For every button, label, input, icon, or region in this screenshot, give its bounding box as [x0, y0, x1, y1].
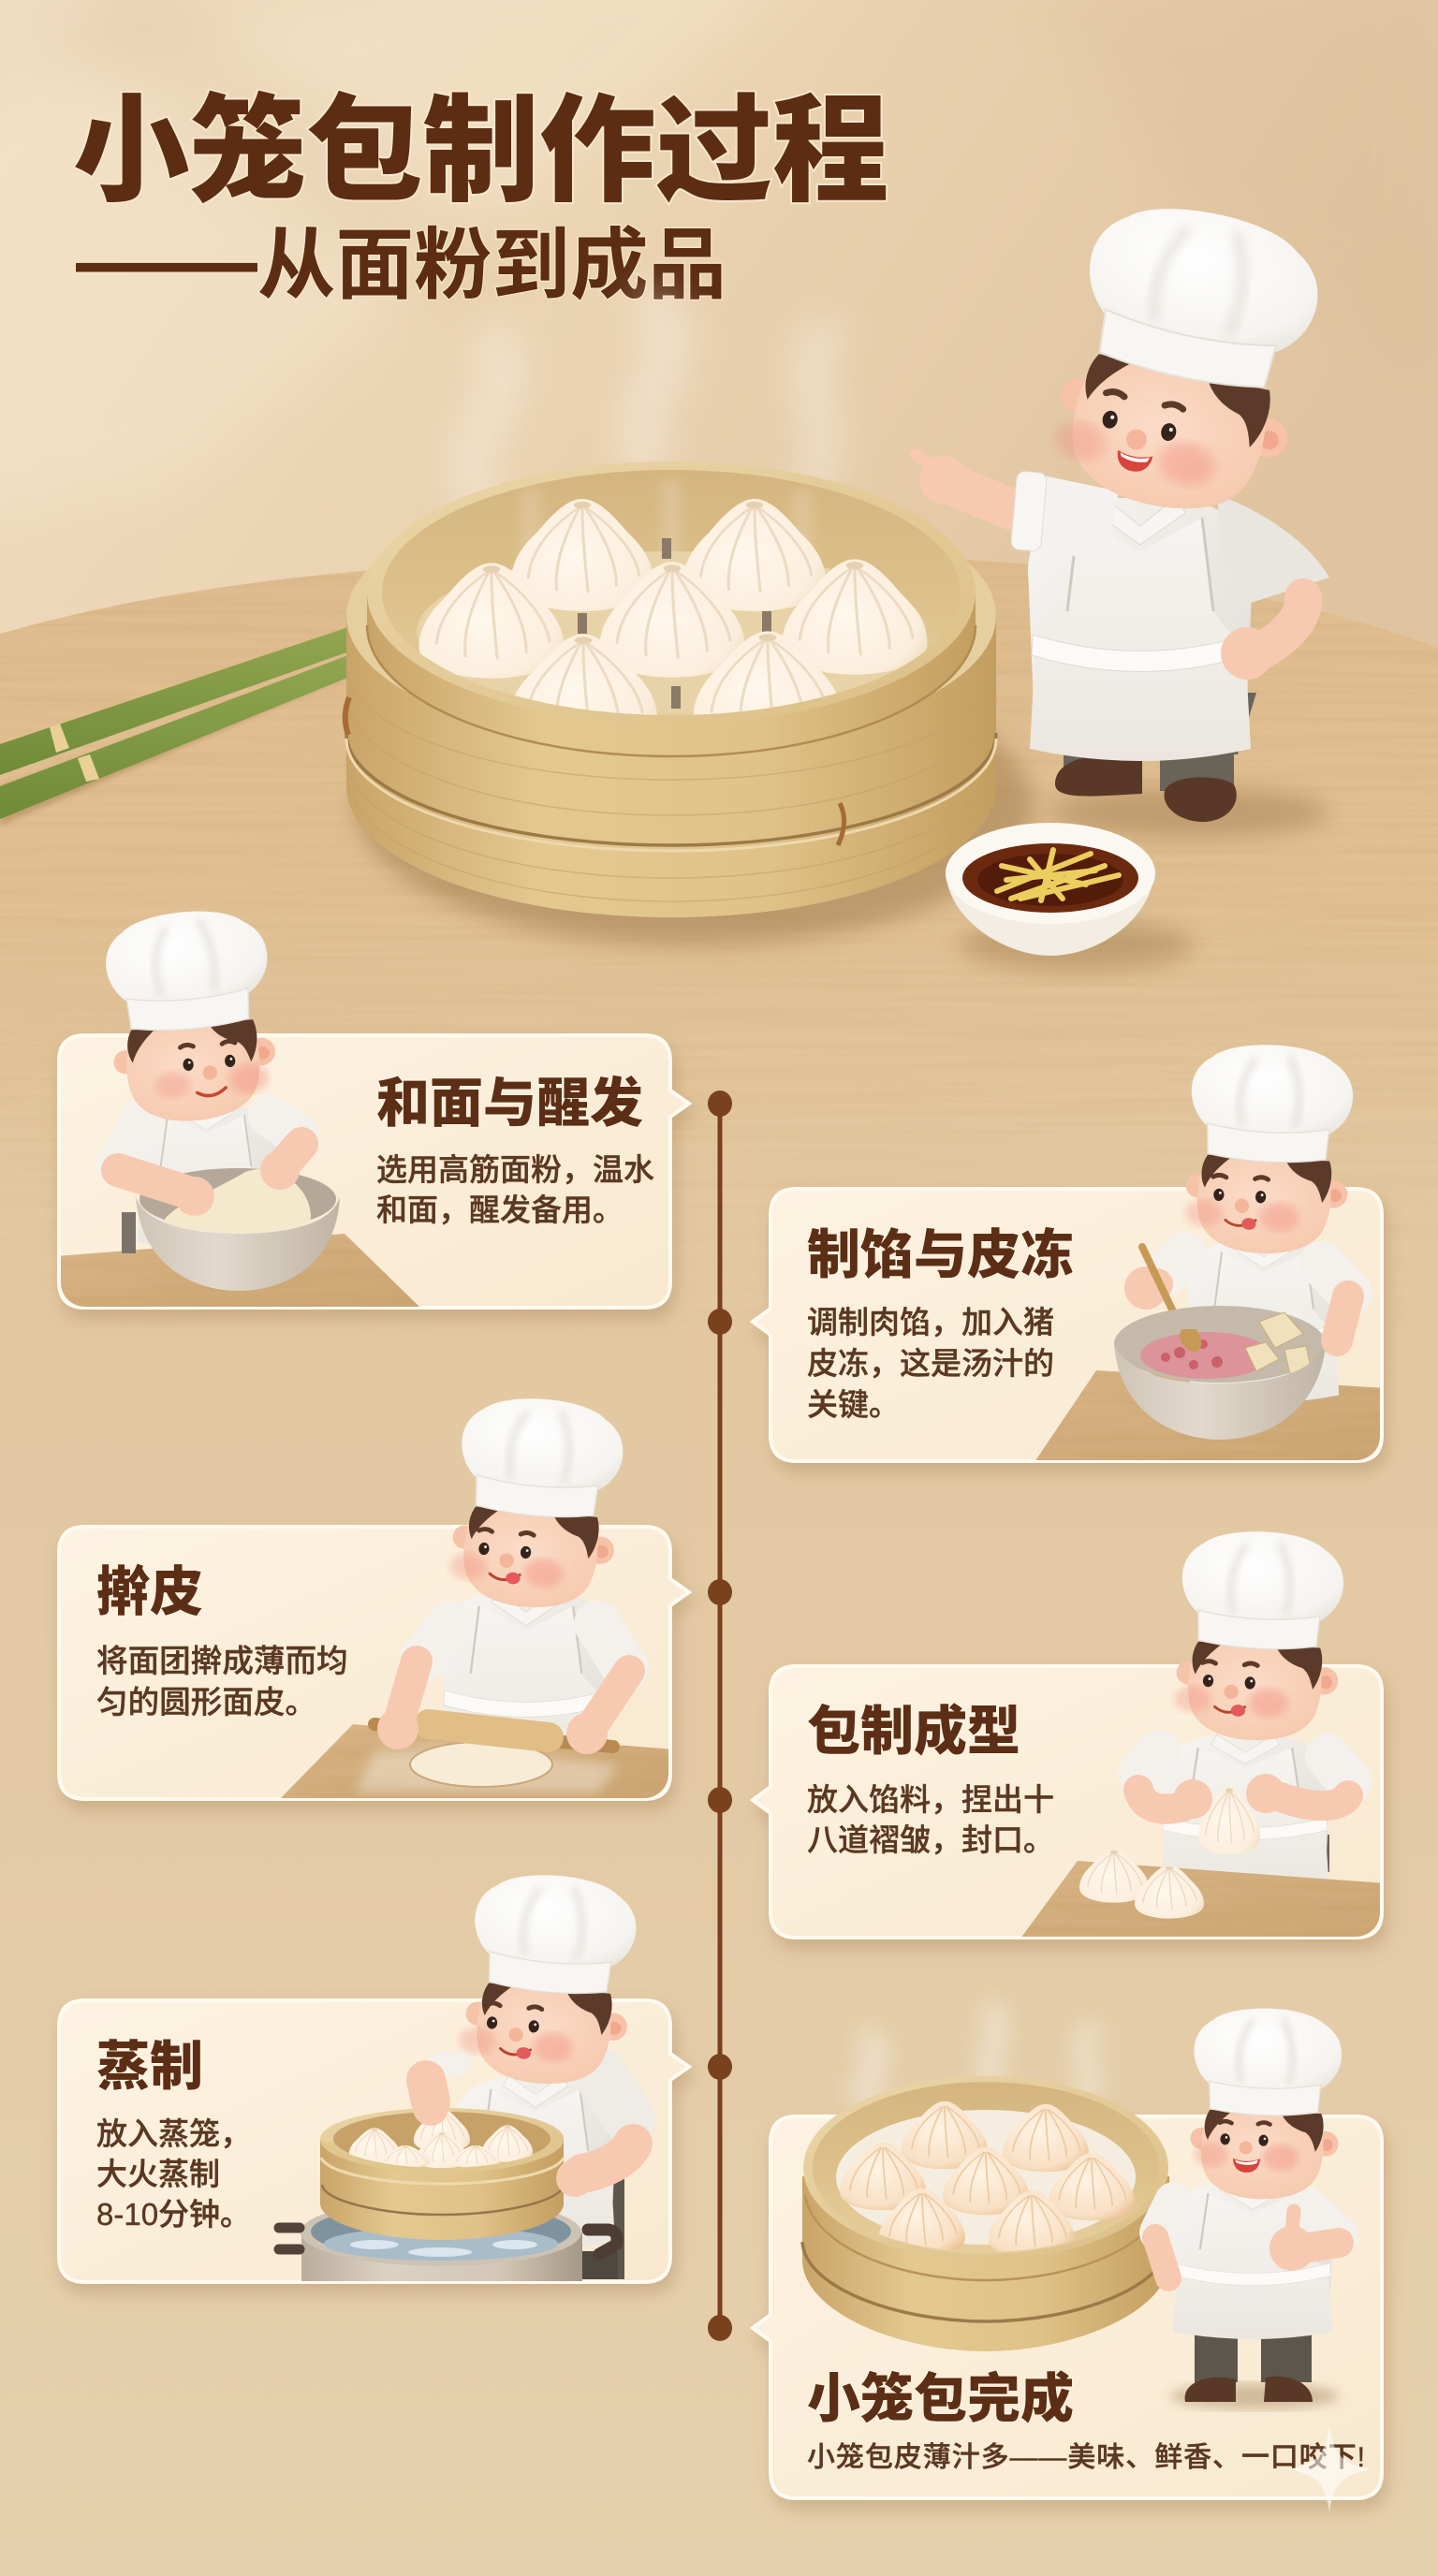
- chef head: [456, 1868, 640, 2091]
- panel: step 3 rolling: [59, 1392, 689, 1802]
- chef body: [455, 2073, 629, 2279]
- chef head: [1182, 1041, 1356, 1258]
- heading: 小笼包完成: [807, 2369, 1074, 2429]
- subtitle: ——从面粉到成品: [76, 210, 726, 312]
- dumplings on table: [1079, 1849, 1204, 1919]
- steamer basket: [320, 2108, 564, 2240]
- timeline: [708, 1090, 732, 2341]
- description: 放入馅料，捏出十: [807, 1782, 1054, 1817]
- description: 关键。: [807, 1387, 900, 1422]
- legs and shoes: [1185, 2312, 1313, 2402]
- dipping sauce dish: [946, 823, 1194, 972]
- description: 选用高筋面粉，温水: [376, 1152, 654, 1187]
- chef arms: [1138, 1774, 1348, 1819]
- right sleeve and arm: [1217, 494, 1329, 680]
- heading: 制馅与皮冻: [807, 1225, 1074, 1285]
- pot with boiling water: [279, 2199, 617, 2284]
- chopsticks: [0, 627, 352, 826]
- chef head: [1042, 190, 1331, 530]
- chef legs and shoes: [1055, 693, 1256, 822]
- panel: step 2 filling: [753, 1041, 1386, 1462]
- description: 放入蒸笼，: [96, 2116, 251, 2151]
- timeline node: [708, 1090, 732, 1117]
- dough sheet: [410, 1742, 552, 1787]
- table: [1034, 1370, 1386, 1462]
- chef head: [1172, 1528, 1346, 1745]
- description: 大火蒸制: [96, 2157, 220, 2191]
- panel: step 4 shaping: [753, 1528, 1386, 1942]
- description: 调制肉馅，加入猪: [807, 1305, 1054, 1339]
- heading: 蒸制: [96, 2037, 203, 2097]
- top ring wall: [367, 593, 976, 756]
- dumplings in steamer: [419, 499, 927, 715]
- rolling pin: [374, 1724, 613, 1747]
- pot handles: [279, 2228, 617, 2254]
- timeline node: [708, 1787, 732, 1813]
- heading: 包制成型: [807, 1702, 1020, 1762]
- heading: 和面与醒发: [376, 1074, 643, 1134]
- finished steamer: [802, 2076, 1169, 2351]
- panel: finished xiaolongbao: [753, 2006, 1382, 2498]
- description: 和面，醒发备用。: [376, 1193, 624, 1227]
- background wall: [0, 0, 1438, 749]
- steam: [865, 2012, 1091, 2106]
- dumpling being pleated: [1198, 1787, 1260, 1854]
- table: [1018, 1861, 1386, 1942]
- dumplings: [349, 2109, 533, 2169]
- chef torso: [423, 1590, 625, 1781]
- timeline node: [708, 2054, 732, 2080]
- title: 小笼包制作过程: [73, 86, 889, 216]
- panel: step 1 kneading: [56, 905, 689, 1309]
- heading: 擀皮: [96, 1562, 203, 1622]
- description: 匀的圆形面皮。: [96, 1685, 316, 1720]
- sparkle watermark: [1288, 2425, 1371, 2513]
- chef torso: [1140, 1734, 1350, 1894]
- description: 小笼包皮薄汁多——美味、鲜香、一口咬下!: [807, 2442, 1365, 2473]
- floured table: [277, 1724, 674, 1802]
- description: 8-10分钟。: [96, 2197, 251, 2232]
- description: 将面团擀成薄而均: [96, 1644, 348, 1679]
- chef head: [101, 905, 281, 1127]
- pointing arm: [916, 455, 1119, 562]
- lower tiers: [346, 611, 996, 917]
- dumplings: [840, 2101, 1135, 2258]
- main chef: [916, 190, 1331, 839]
- timeline node: [708, 1309, 732, 1335]
- wooden table surface: [0, 560, 1438, 1252]
- timeline node: [708, 1579, 732, 1605]
- chef arms: [413, 2064, 633, 2197]
- chef arms: [377, 1661, 629, 1754]
- chef mixing filling: [1114, 1238, 1350, 1440]
- table: [56, 1234, 421, 1309]
- steam over main steamer: [471, 309, 824, 496]
- chef kneading: [118, 1104, 340, 1291]
- description: 八道褶皱，封口。: [807, 1822, 1054, 1857]
- panel: step 5 steaming: [59, 1868, 689, 2284]
- description: 皮冻，这是汤汁的: [807, 1346, 1054, 1381]
- main bamboo steamer: [345, 461, 1034, 946]
- timeline node: [708, 2315, 732, 2341]
- chef head: [447, 1392, 627, 1615]
- proud chef: [1155, 2006, 1343, 2409]
